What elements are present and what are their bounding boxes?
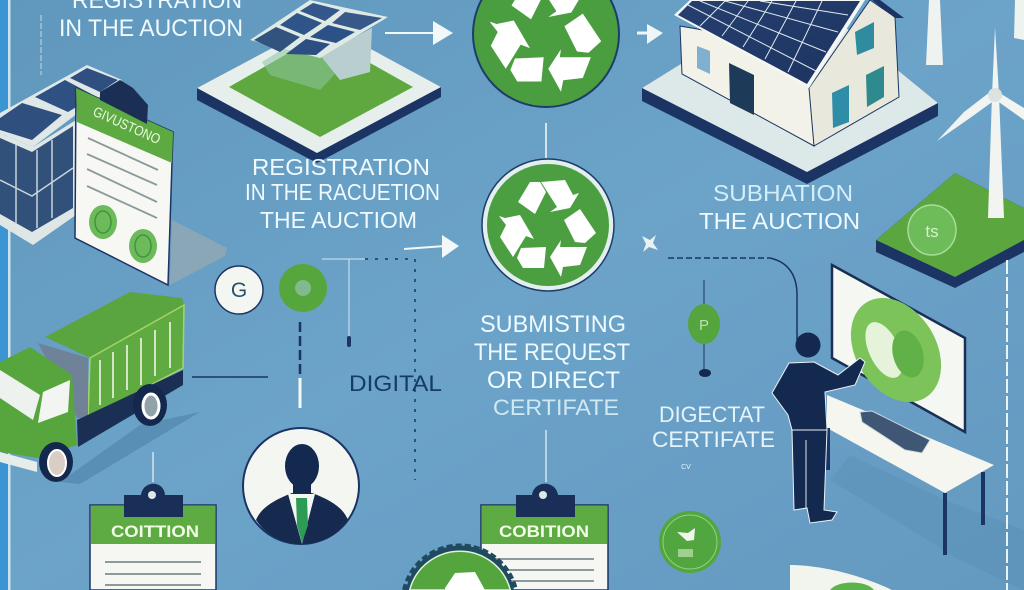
rear wheel [133,384,167,426]
icon: bottom seal badge [404,545,516,590]
text: digital label: DIGITAL [349,371,442,396]
text: submitting the request: SUBMISTING [480,311,626,338]
icon: G circle [215,266,263,314]
text: submitting the request: CERTIFATE [493,395,619,420]
text: submitting the request: OR DIRECT [487,367,620,394]
text: central registration label: REGISTRATION [252,154,430,180]
text: central registration label: IN THE RACUETION [245,179,440,205]
icon: person avatar [243,428,359,544]
clip [100,80,148,124]
illustration: standing man [772,332,865,523]
header text: COBITION [499,522,589,541]
text: top registration label: IN THE AUCTION [59,15,243,42]
text: digital certificate: CERTIFATE [652,427,775,452]
text: submitting the request [474,311,630,420]
icon: G circle: G [231,279,247,302]
icon: small star [642,235,658,252]
illustration: solar building at left [0,65,122,245]
illustration: wind turbine on green platform [876,27,1024,288]
text: submission label: SUBHATION [713,180,853,206]
text: submitting the request: THE REQUEST [474,339,630,366]
icon: top recycling badge [473,0,619,107]
clipboard: bottom centre condition [481,430,608,590]
icon: green dot [279,264,327,312]
connector: dashed line right [668,258,797,340]
small mark: CV [681,464,691,471]
illustration: solar panel on platform [197,0,441,163]
connector: right dotted line [1006,260,1008,590]
header text: GIVUSTONO [91,103,163,147]
illustration: far wind turbine towers [926,0,1024,65]
illustration: monitor [832,265,965,432]
arrow: middle [404,235,459,258]
text: top registration label [59,0,243,42]
icon: green round badge [659,511,721,573]
illustration: desk [827,395,994,555]
left edge strip [0,0,41,590]
header text: COITTION [111,522,199,541]
arrow: small right of top badge [637,24,663,44]
illustration: house with solar roof [642,0,938,184]
illustration: green truck [0,292,200,484]
desk shadow [830,455,1024,590]
text: central registration label: THE AUCTIOM [260,207,417,233]
illustration: wind turbine on green platform: ts [925,222,939,241]
arrow: top centre [385,21,453,45]
clip [124,484,183,517]
clip [516,484,575,517]
connector: stem above middle badge [545,123,547,158]
keyboard [860,411,930,453]
front wheel [39,442,73,482]
connector and green pill: P [699,317,709,334]
text: submission label [699,180,860,234]
text: central registration label [245,154,440,233]
text: submission label: THE AUCTION [699,208,860,234]
text: digital certificate [652,402,775,452]
seals [89,205,117,239]
connector and green pill [688,280,720,377]
clipboard: bottom left condition [90,452,216,590]
connector: dashed lines centre [192,259,415,480]
clipboard: left certificate [75,80,227,285]
icon: middle recycling badge [482,159,614,291]
text: digital certificate: DIGECTAT [659,402,765,427]
illustration: bottom right paper [790,565,892,590]
